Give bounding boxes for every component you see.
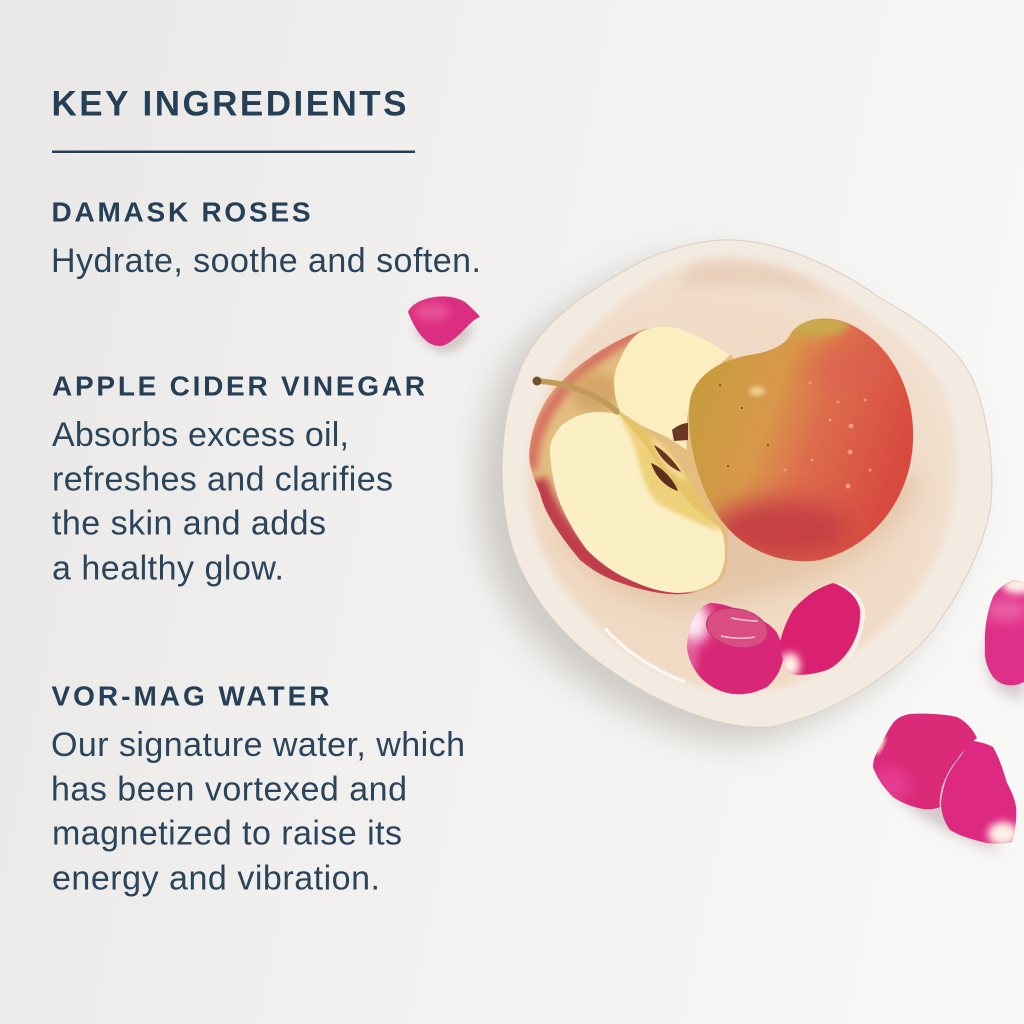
petal in plate: right xyxy=(780,583,866,675)
apple stem xyxy=(532,376,617,412)
ingredient: vor-mag water: magnetized to raise its xyxy=(52,814,402,852)
ingredient: damask roses: Hydrate, soothe and soften. xyxy=(51,242,481,280)
ingredient: vor-mag water xyxy=(51,680,465,898)
ingredient: vor-mag water: energy and vibration. xyxy=(52,860,380,898)
core xyxy=(618,412,722,532)
title: KEY INGREDIENTS xyxy=(52,84,406,124)
ingredient: damask roses xyxy=(51,196,481,280)
petal in plate: left xyxy=(687,603,783,694)
ingredient: vor-mag water: Our signature water, which xyxy=(51,726,465,764)
ingredient: apple cider vinegar: refreshes and clarifies xyxy=(52,460,393,498)
icon: floating rose petal xyxy=(408,296,480,352)
ingredient: apple cider vinegar: Absorbs excess oil, xyxy=(52,416,349,454)
front flesh xyxy=(550,412,725,593)
plate xyxy=(502,240,992,727)
ingredient: apple cider vinegar: a healthy glow. xyxy=(52,550,284,588)
ingredient: apple cider vinegar: the skin and adds xyxy=(52,504,326,542)
petals: bottom pair xyxy=(868,708,1020,852)
water drop on petal xyxy=(703,603,771,653)
ingredient: apple cider vinegar: APPLE CIDER VINEGAR xyxy=(52,370,425,402)
apple half xyxy=(529,326,733,594)
whole apple xyxy=(689,313,913,561)
petal: right edge xyxy=(980,575,1024,698)
apple seeds xyxy=(651,423,688,491)
illustration: plate with apple and petals xyxy=(480,240,992,743)
title rule xyxy=(52,150,415,153)
apple shadow xyxy=(555,440,925,607)
back flesh xyxy=(614,327,730,450)
ingredient: apple cider vinegar xyxy=(52,370,425,588)
ingredient: vor-mag water: has been vortexed and xyxy=(51,770,407,808)
plate shadow xyxy=(480,256,970,743)
ingredient: vor-mag water: VOR-MAG WATER xyxy=(52,680,330,712)
ingredient: damask roses: DAMASK ROSES xyxy=(52,196,310,228)
